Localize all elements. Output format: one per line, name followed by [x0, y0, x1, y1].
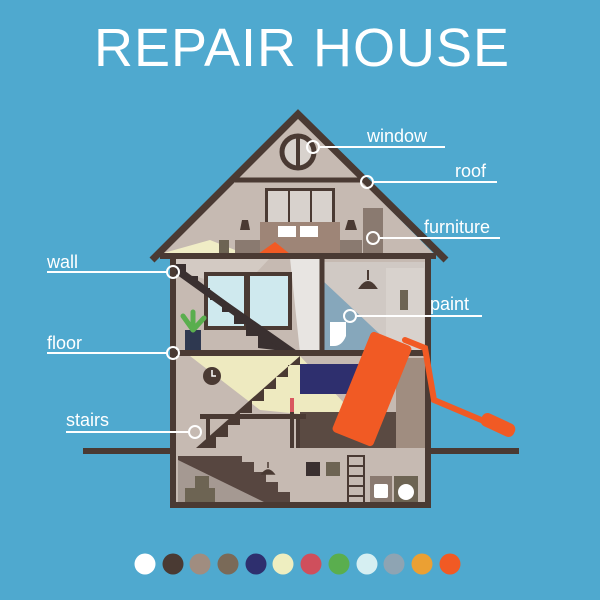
stairs upper — [173, 264, 300, 353]
kitchen cabinets — [300, 358, 426, 448]
stairs middle — [196, 356, 300, 448]
plant — [183, 312, 204, 352]
ground line — [83, 448, 519, 454]
structure outline — [152, 114, 446, 508]
attic furniture — [219, 188, 383, 254]
light beams — [175, 258, 270, 290]
label text: furniture — [424, 217, 490, 237]
label text: floor — [47, 333, 82, 353]
label text: wall — [46, 252, 78, 272]
title: REPAIR HOUSE — [94, 18, 510, 78]
bathroom — [330, 268, 424, 352]
label text: stairs — [66, 410, 109, 430]
label text — [46, 126, 490, 430]
house — [83, 114, 519, 508]
body fill — [173, 256, 428, 505]
stairs basement — [178, 456, 290, 505]
roof fill — [160, 116, 436, 256]
basement items — [185, 456, 418, 505]
table and chairs — [200, 398, 306, 448]
upper floor window — [204, 272, 292, 330]
clock — [203, 367, 221, 385]
callouts — [47, 141, 500, 438]
label text: roof — [455, 161, 487, 181]
label text: window — [366, 126, 428, 146]
icon: round window — [282, 136, 314, 168]
label text: paint — [430, 294, 469, 314]
icon: paint roller — [331, 331, 517, 447]
colour palette — [134, 554, 460, 574]
